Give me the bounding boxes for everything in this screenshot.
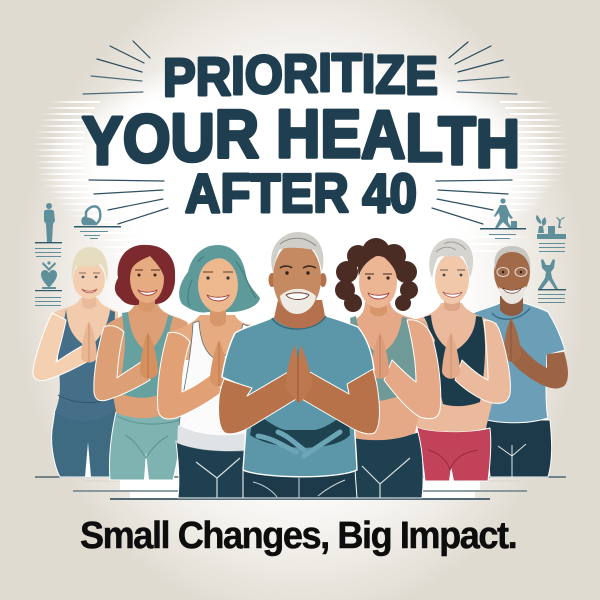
hands (285, 345, 313, 403)
hands (140, 332, 158, 379)
hands (210, 340, 228, 387)
title (82, 43, 520, 224)
icon: kettlebell (74, 206, 121, 239)
curly hair (335, 238, 418, 312)
group of seven people (33, 232, 568, 498)
person 3: teal hair, white tank, dark leggings (157, 245, 260, 498)
icon: walking figure (480, 198, 526, 239)
hands (504, 318, 521, 362)
icons (35, 198, 566, 306)
person 4: central man, teal t-shirt (219, 232, 379, 498)
tagline: Small Changes, Big Impact. (80, 513, 516, 556)
floor lines (35, 477, 566, 499)
person 6: silver hair, black top, red leggings (410, 238, 510, 481)
person 7: glasses and white beard, blue t-shirt (473, 246, 568, 477)
title line: Prioritize: PRIORITIZE (163, 43, 438, 108)
icon: heart (35, 261, 62, 306)
rays around title (83, 41, 517, 224)
hands (81, 321, 97, 362)
person 2: auburn hair, teal top (94, 245, 188, 480)
hands (371, 332, 389, 379)
white speed streaks right (462, 101, 569, 252)
hands (442, 332, 460, 379)
title line: Your Health: YOUR HEALTH (82, 96, 520, 182)
icon: plants and pots (536, 215, 566, 252)
person 1: short blonde hair, blue tank (33, 247, 119, 477)
icon: lifting figures (538, 259, 566, 303)
title line: After 40: AFTER 40 (185, 162, 417, 224)
white speed streaks left (33, 101, 144, 255)
icon: standing figure (35, 203, 62, 257)
person 5: curly brown hair, grey-teal top, dark leggings (335, 238, 441, 498)
